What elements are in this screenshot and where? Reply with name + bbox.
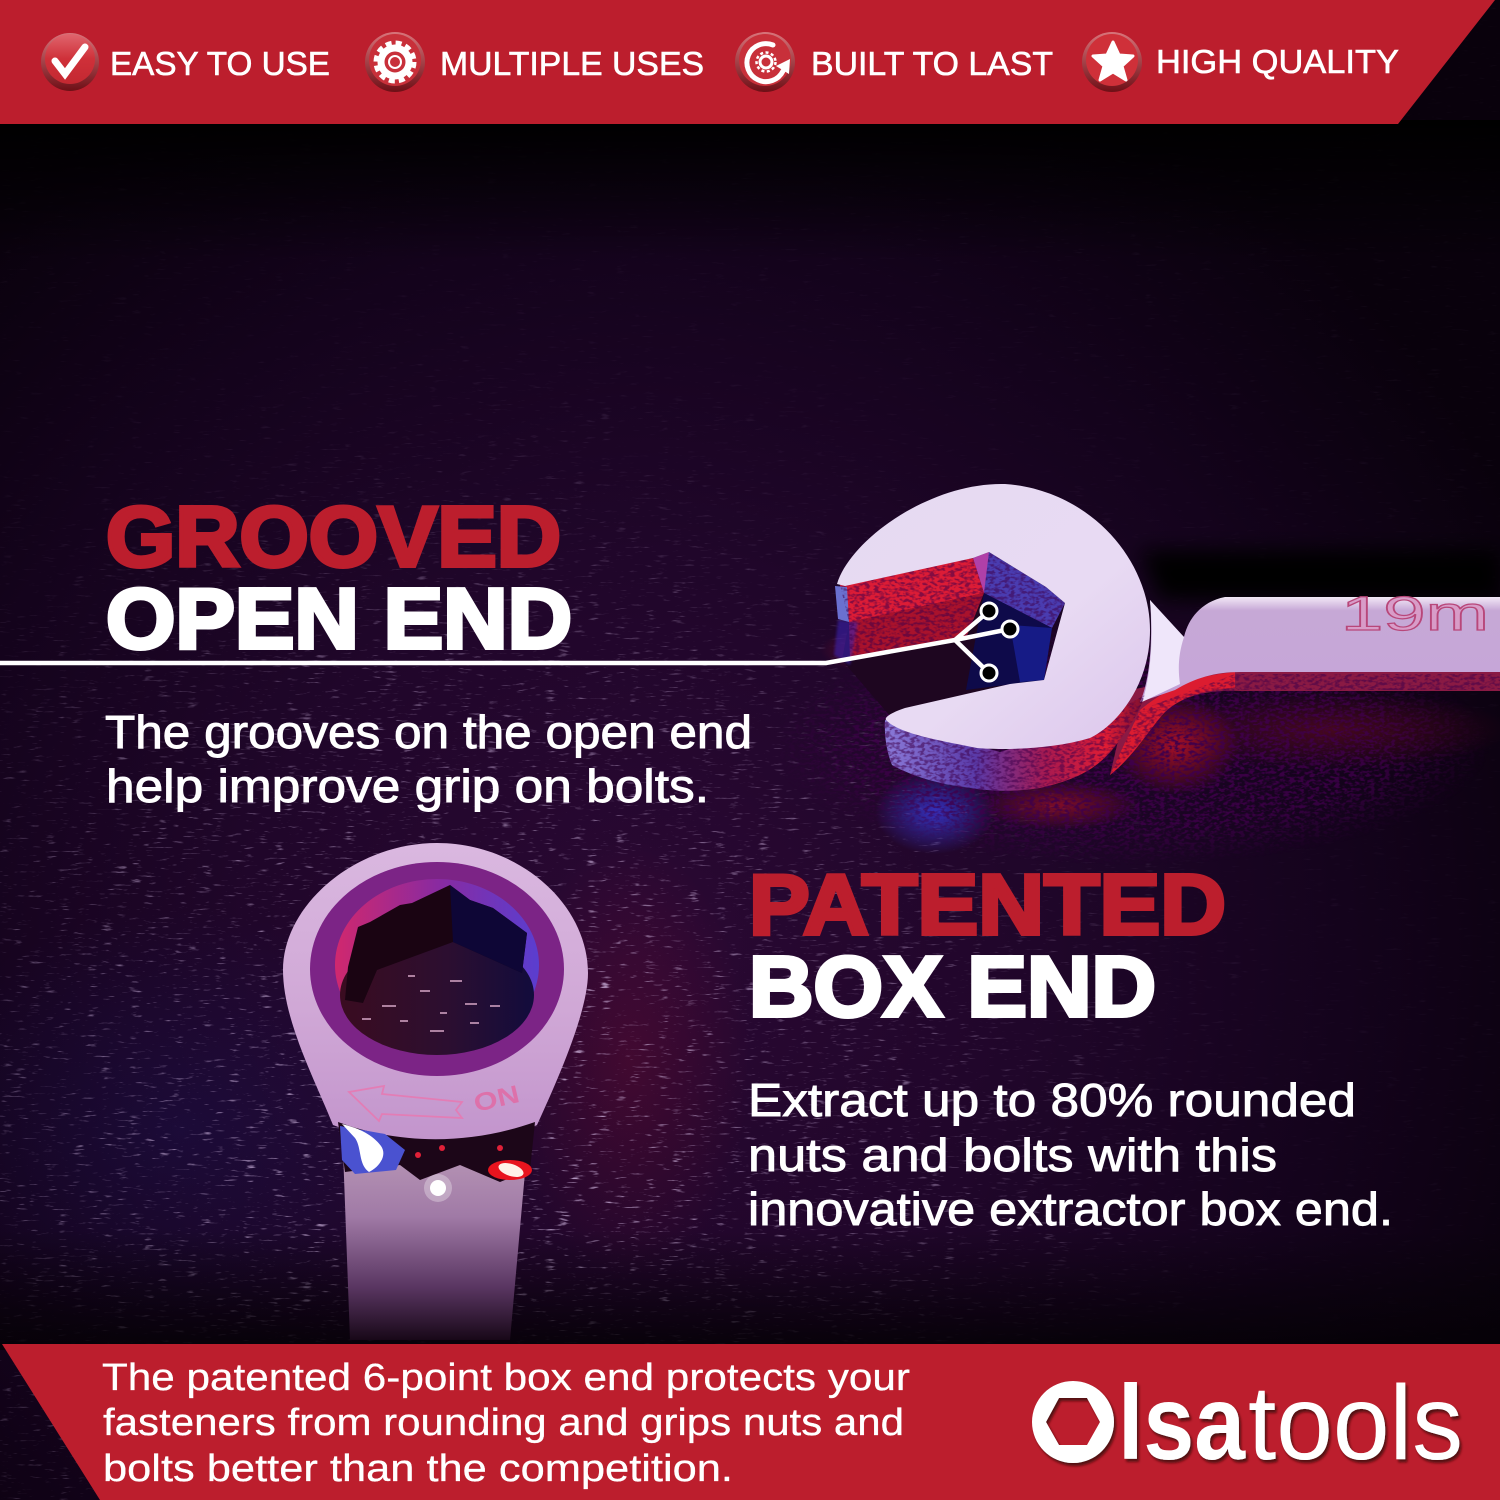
engraved ON: ON <box>471 1080 522 1118</box>
bore floor <box>340 935 534 1055</box>
chrome neck reflections <box>338 1122 535 1202</box>
text: footer statement: The patented 6-point box end protects your <box>102 1357 910 1399</box>
surface reflections <box>780 600 1500 880</box>
heading: patented box end: PATENTED <box>749 858 1226 953</box>
logo: Olsatools: lsa <box>1118 1364 1246 1482</box>
jaw tip blue facet <box>835 586 849 622</box>
feature: high quality <box>1082 32 1399 92</box>
handle side band <box>1110 672 1500 775</box>
metal surface speckle <box>840 553 1500 791</box>
feature: built to last <box>735 32 1053 92</box>
heading: grooved open end <box>106 490 572 667</box>
jaw inner red wall <box>840 558 984 622</box>
text: footer statement: bolts better than the competition. <box>103 1448 733 1490</box>
feature: multiple uses: MULTIPLE USES <box>440 45 704 82</box>
feature: easy to use: EASY TO USE <box>110 45 330 82</box>
handle <box>343 1150 527 1340</box>
stamped size marking: 19m <box>1341 588 1489 641</box>
text: patented box end description: nuts and bolts with this <box>748 1129 1277 1181</box>
heading: patented box end: BOX END <box>749 940 1156 1035</box>
text: patented box end description: innovative extractor box end. <box>748 1183 1393 1235</box>
wrench head face <box>837 484 1150 749</box>
icon: check button <box>41 33 99 91</box>
icon: gear button <box>365 32 425 92</box>
inner bore <box>335 879 539 1051</box>
feature: built to last: BUILT TO LAST <box>811 45 1053 82</box>
icon: star button <box>1082 32 1142 92</box>
head lower rim <box>885 695 1145 791</box>
top banner <box>0 0 1495 124</box>
logo: Olsatools <box>1032 1364 1463 1482</box>
open end wrench photo <box>810 484 1500 854</box>
icon: cycle gear button <box>735 32 795 92</box>
jaw inner floor reflection <box>842 593 1012 716</box>
logo hex nut mark <box>1032 1381 1114 1463</box>
handle face <box>1140 597 1500 702</box>
outer purple ring <box>310 862 564 1076</box>
text: footer statement <box>102 1357 910 1490</box>
text: grooved open end description: The grooves on the open end <box>105 706 752 758</box>
text: patented box end description: Extract up to 80% rounded <box>748 1074 1356 1126</box>
heading: grooved open end: OPEN END <box>106 572 572 667</box>
box end wrench photo <box>283 843 588 1340</box>
feature: high quality: HIGH QUALITY <box>1156 43 1399 80</box>
heading: patented box end <box>749 858 1226 1035</box>
wrench shadow <box>1140 550 1500 600</box>
text: grooved open end description <box>105 706 752 812</box>
text: patented box end description <box>748 1074 1393 1235</box>
feature: multiple uses <box>365 32 704 92</box>
neck highlight <box>1142 600 1184 702</box>
engraved arrow <box>349 1086 462 1121</box>
bottom banner <box>2 1344 1500 1500</box>
feature: easy to use <box>41 33 330 91</box>
logo: Olsatools: tools <box>1248 1364 1463 1482</box>
hex socket walls <box>345 885 527 1003</box>
callout dot markers <box>981 603 1018 681</box>
text: grooved open end description: help improve grip on bolts. <box>106 760 709 812</box>
callout line to grooves <box>0 603 1018 681</box>
head body <box>283 843 588 1144</box>
floor sparkles <box>362 975 500 1032</box>
heading: grooved open end: GROOVED <box>106 490 561 585</box>
hex back wall <box>984 552 1065 628</box>
text: footer statement: fasteners from rounding and grips nuts and <box>103 1402 904 1444</box>
